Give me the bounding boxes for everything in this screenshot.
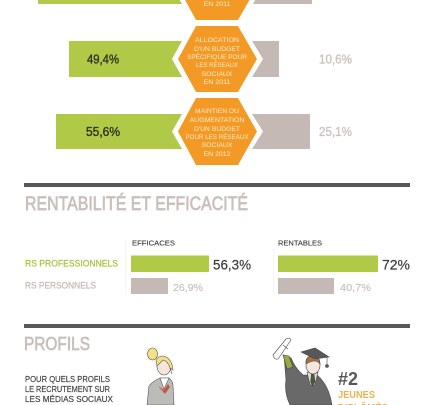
hexagon: allocation: SPÉCIFIQUE POUR (187, 52, 247, 61)
icon: diploma (273, 338, 291, 359)
bar row: budget 2011 cropped top (38, 0, 312, 20)
mortarboard cap (301, 348, 329, 359)
value: 25,1%: 25,1% (319, 125, 352, 139)
column heading: rentables: RENTABLES (278, 238, 322, 248)
hexagon: allocation: D'UN BUDGET (194, 46, 240, 53)
divider rule: rentabilité (24, 183, 410, 187)
hexagon: maintien: AUGMENTATION (190, 117, 245, 124)
text block: pour quels profils (25, 375, 114, 404)
hexagon: maintien (178, 98, 257, 165)
rank number: #2 (338, 369, 358, 389)
hexagon: maintien: MAINTIEN OU (195, 108, 239, 115)
text block: pour quels profils: LE RECRUTEMENT SUR (25, 385, 110, 394)
heading: rentabilité et efficacité: RENTABILITÉ ET EFFICACITÉ (25, 194, 248, 215)
heading: profils: PROFILS (24, 333, 90, 354)
divider rule: profils (24, 324, 410, 328)
hexagon: allocation: SOCIAUX (202, 71, 233, 78)
icon: graduate (273, 338, 332, 405)
bar: rentables professionnels 72%: 72% (382, 256, 410, 272)
value: 10,6%: 10,6% (319, 52, 352, 66)
hexagon: allocation: ALLOCATION (195, 37, 239, 44)
bar: efficaces professionnels 56,3%: 56,3% (213, 256, 251, 272)
icon: businesswoman (147, 348, 174, 405)
rank label: JEUNES (338, 389, 375, 401)
bar row: budget 2011 cropped top: EN 2011 (204, 1, 231, 8)
rank block: #2 jeunes (338, 369, 388, 405)
bar: efficaces professionnels 56,3% (131, 256, 251, 272)
panel: budget comparison (38, 0, 352, 165)
hexagon: allocation (178, 26, 257, 92)
graduate gown (284, 355, 332, 405)
value: 49,4%: 49,4% (87, 52, 119, 66)
hexagon: allocation: LES RÉSEAUX (196, 60, 239, 69)
panel: bar chart rentabilité (25, 238, 410, 295)
text block: pour quels profils: POUR QUELS PROFILS (25, 375, 110, 384)
row label: RS personnels: RS PERSONNELS (25, 280, 96, 290)
column heading: efficaces: EFFICACES (132, 238, 175, 248)
hexagon: maintien: SOCIAUX (202, 142, 233, 149)
graduate head (306, 356, 320, 374)
bar: efficaces personnels 26,9% (131, 278, 203, 294)
row label: RS professionnels: RS PROFESSIONNELS (25, 258, 118, 268)
hexagon: maintien: POUR LES RÉSEAUX (186, 132, 249, 141)
bar row: maintien budget 2012 (56, 98, 352, 165)
hexagon: maintien: EN 2012 (204, 151, 231, 158)
text block: pour quels profils: LES MÉDIAS SOCIAUX (25, 395, 114, 404)
value: 55,6%: 55,6% (86, 125, 120, 139)
bar: efficaces personnels 26,9%: 26,9% (173, 282, 203, 294)
bar: rentables personnels 40,7%: 40,7% (340, 282, 371, 294)
bar row: allocation budget 2011 (69, 26, 352, 92)
bar: rentables professionnels 72% (278, 256, 410, 272)
bar: rentables personnels 40,7% (278, 278, 371, 294)
hexagon: allocation: EN 2011 (204, 79, 231, 86)
hexagon: maintien: D'UN BUDGET (194, 126, 240, 133)
